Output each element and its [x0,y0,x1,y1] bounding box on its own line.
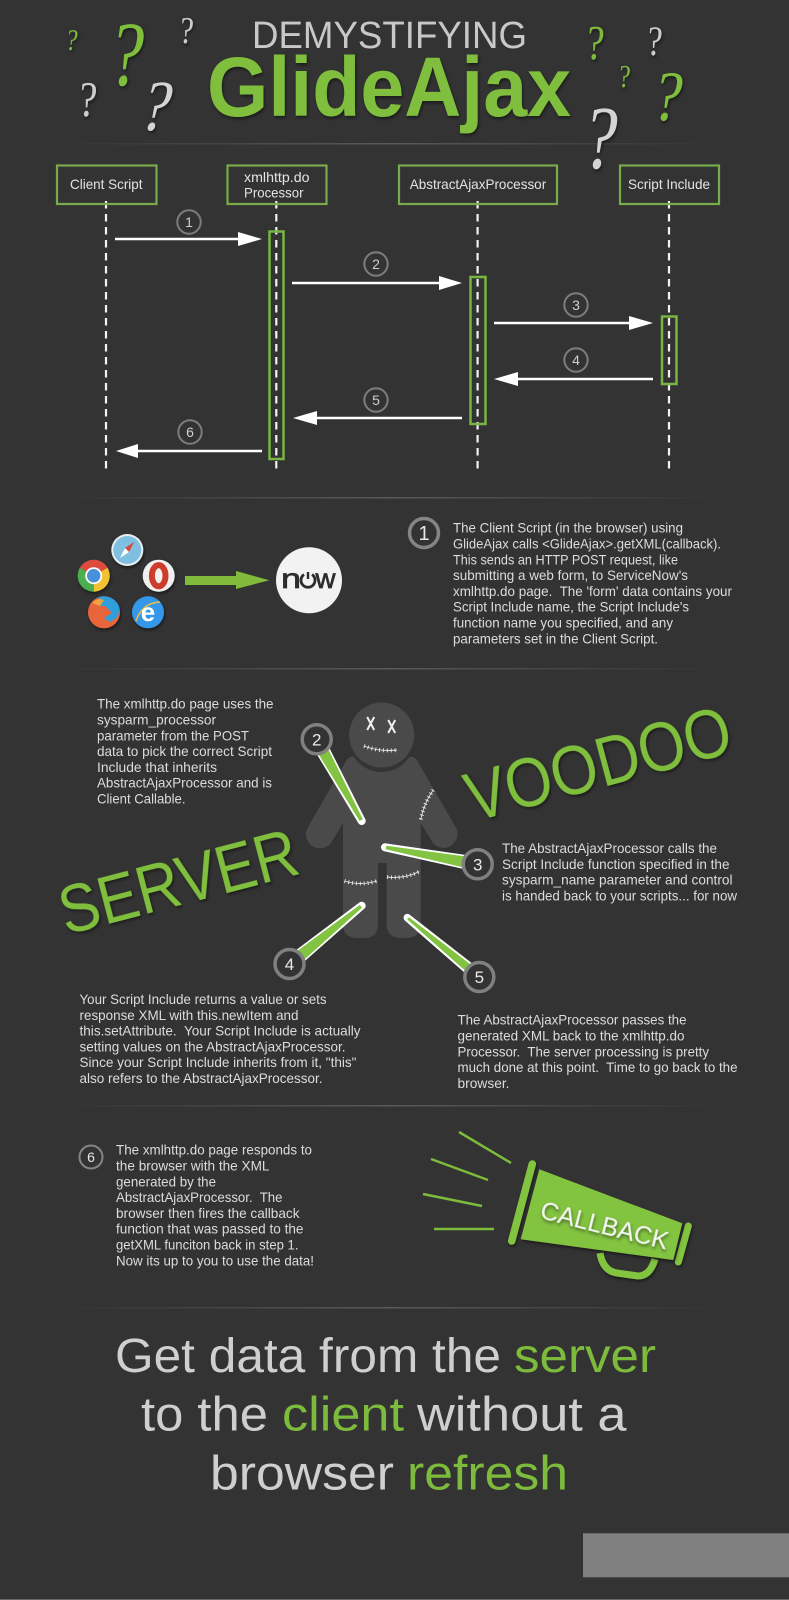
text block: step 2: sysparm_processor [97,712,216,728]
participant: Script Include [620,166,719,204]
text block: step 4: also refers to the AbstractAjaxProcessor. [80,1070,322,1086]
arrow 6 [116,444,262,458]
arrow: browser to server [185,571,269,589]
browsers to ServiceNow graphic [78,534,342,628]
question marks decoration: ? [585,15,606,70]
text block: step 4: response XML with this.newItem and [80,1007,298,1023]
text block: step 6: the browser with the XML [116,1158,270,1174]
line 2: client [282,1389,404,1442]
question marks decoration: ? [105,3,151,105]
step number 2 [364,252,388,276]
text block: step 5: Processor. The server processing is pretty [458,1043,709,1059]
question marks decoration: ? [618,59,632,95]
doll stitches [344,746,433,884]
text block: step 4: Since your Script Include inherits from it, "this" [80,1054,357,1070]
question marks decoration: ? [179,10,195,52]
participant: AbstractAjaxProcessor: AbstractAjaxProcessor [410,176,547,192]
line 3 [210,1447,568,1500]
step 6 badge: 6 [87,1149,95,1165]
text block: step 4: setting values on the AbstractAjaxProcessor. [80,1038,346,1054]
arrow 3 [494,316,653,330]
text block: step 6: Now its up to you to use the data! [116,1252,314,1268]
text block: step 1: submitting a web form, to ServiceNow's [453,567,688,583]
icon: internet explorer: e [141,597,155,627]
megaphone callback graphic [423,1132,688,1276]
step 6 badge [80,1146,102,1168]
step number 5: 5 [372,392,380,408]
doll head shadow [349,706,415,772]
text block: step 5: browser. [458,1075,510,1091]
text block: step 2: Include that inherits [97,759,217,775]
doll head [349,702,414,768]
line 1: server [514,1330,656,1383]
megaphone handle [600,1253,655,1276]
step number 1: 1 [185,214,193,230]
text block: step 6: AbstractAjaxProcessor. The [116,1189,283,1205]
text block: step 5 [458,1012,738,1091]
step number 6 [178,420,202,444]
step 1 badge [410,518,438,548]
text block: step 1: The Client Script (in the browser) using [453,520,683,536]
pin 5 [404,914,494,992]
text block: step 1 [453,520,732,646]
line 3: browser [210,1447,394,1500]
text block: step 4 [80,991,360,1086]
question marks decoration: ? [580,88,625,188]
heading: SERVER: SERVER [51,814,306,950]
title: GlideAjax: GlideAjax [207,40,571,134]
icon: internet explorer [132,596,164,628]
header [207,15,571,134]
step number 1 [177,210,201,234]
text block: step 3 [502,840,738,903]
text block: step 6 [116,1142,314,1268]
text block: step 1: function name you specified, and any [453,614,673,630]
step 1 badge: 1 [418,523,430,545]
step number 2: 2 [372,256,380,272]
sound lines [423,1132,511,1229]
text block: step 5: The AbstractAjaxProcessor passes the [458,1012,687,1028]
line 2 [141,1389,627,1442]
arrow 4 [494,372,653,386]
question marks decoration: ? [649,58,689,136]
text block: step 6: getXML funciton back in step 1. [116,1236,298,1252]
arrow 2 [292,276,462,290]
question marks decoration: ? [65,24,80,57]
text block: step 1: GlideAjax calls <GlideAjax>.getXML(callback). [453,536,721,552]
text block: step 5: much done at this point. Time to go back to the [458,1059,738,1075]
step number 5 [364,388,388,412]
line 2: without a [416,1389,627,1442]
step number 3: 3 [572,297,580,313]
participant: xmlhttp.do Processor: xmlhttp.do [244,169,310,185]
icon: safari [111,534,143,566]
text block: step 2: Client Callable. [97,790,186,806]
text block: step 1: This sends an HTTP POST request, like [453,551,678,567]
grey block bottom right [583,1533,789,1577]
participant: Client Script [57,166,156,204]
text block: step 2: data to pick the correct Script [97,743,272,759]
lifelines [106,201,669,469]
pin 4 [275,902,366,978]
step number 3 [564,293,588,317]
text block: step 6: function that was passed to the [116,1221,304,1237]
text block: step 2: The xmlhttp.do page uses the [97,696,274,712]
step number 4: 4 [572,352,580,368]
question marks decoration: ? [646,19,664,65]
participant: xmlhttp.do Processor [228,166,326,204]
pin 3: 3 [473,856,482,874]
voodoo doll [275,702,494,992]
activation bars [270,232,676,459]
participant: Script Include: Script Include [628,176,710,192]
question marks decoration: ? [134,65,182,146]
pin 5: 5 [475,968,484,987]
doll body [306,757,458,938]
text block: step 3: The AbstractAjaxProcessor calls the [502,840,717,856]
pin 3 [381,843,492,879]
participant: AbstractAjaxProcessor [399,166,557,204]
text block: step 2: parameter from the POST [97,727,249,743]
arrow 1 [115,232,262,246]
text block: step 6: browser then fires the callback [116,1205,300,1221]
step number 4 [564,348,588,372]
text block: step 6: The xmlhttp.do page responds to [116,1142,312,1158]
icon: ServiceNow now logo: n [281,563,301,594]
line 1 [115,1330,656,1383]
line 2: to the [141,1389,268,1442]
megaphone label: CALLBACK [538,1197,672,1256]
text block: step 4: Your Script Include returns a value or sets [80,991,326,1007]
line 3: refresh [407,1447,568,1500]
text block: step 3: sysparm_name parameter and control [502,872,732,888]
title: demystifying: DEMYSTIFYING [252,15,527,57]
pin 2: 2 [312,730,321,750]
text block: step 1: Script Include name, the Script Include's [453,599,689,615]
text block: step 4: this.setAttribute. Your Script Include is actually [80,1023,360,1039]
text block: step 6: generated by the [116,1173,216,1189]
icon: ServiceNow now logo: w [315,563,336,594]
question marks decoration: ? [77,72,99,127]
icon: ServiceNow now logo [276,547,342,613]
text block: step 5: generated XML back to the xmlhttp.do [458,1028,685,1044]
heading: VOODOO: VOODOO [457,691,740,836]
icon: opera [143,560,175,592]
icon: firefox [88,596,120,628]
text block: step 1: xmlhttp.do page. The 'form' data contains your [453,583,732,599]
doll eyes [367,717,395,733]
pin 2 [302,725,366,825]
text block: step 2: AbstractAjaxProcessor and is [97,775,272,791]
text block: step 2 [97,696,274,806]
icon: chrome [78,560,110,592]
step number 6: 6 [186,424,194,440]
participant: xmlhttp.do Processor: Processor [244,184,304,200]
arrow 5 [293,411,462,425]
megaphone body [521,1169,682,1260]
sequence diagram [57,166,719,469]
text block: step 3: is handed back to your scripts... for now [502,887,738,903]
line 1: Get data from the [115,1330,501,1383]
question marks decoration [65,3,689,188]
pin 4: 4 [285,955,294,974]
participant: Client Script: Client Script [70,176,143,192]
closing statement [115,1330,656,1500]
text block: step 3: Script Include function specified in the [502,856,730,872]
megaphone bars [512,1164,688,1262]
text block: step 1: parameters set in the Client Script. [453,630,658,646]
